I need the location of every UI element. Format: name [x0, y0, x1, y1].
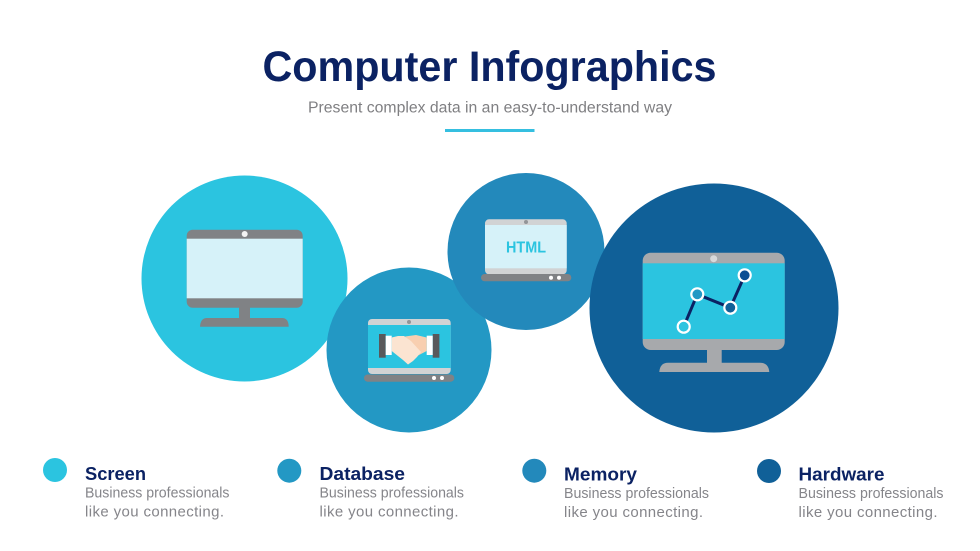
legend: memory: Business professionals: [564, 485, 709, 502]
legend: memory: like you connecting.: [564, 504, 703, 521]
subtitle: Present complex data in an easy-to-understand way: [308, 100, 672, 116]
legend: screen: [43, 458, 230, 520]
legend: hardware: like you connecting.: [798, 504, 938, 521]
panel: database circle: [326, 268, 492, 432]
icon: laptop with HTML: [481, 219, 571, 281]
legend: screen: Screen: [85, 463, 146, 484]
legend: database: [277, 459, 464, 520]
icon: laptop with handshake: [364, 319, 454, 382]
panel: screen circle: [142, 176, 348, 382]
legend: hardware: Business professionals: [798, 485, 944, 502]
legend: hardware: Hardware: [798, 463, 884, 484]
line chart: [678, 269, 751, 333]
legend: screen: like you connecting.: [85, 504, 224, 520]
icon: laptop with HTML: HTML: [506, 240, 546, 256]
panel: hardware circle: [590, 184, 838, 432]
legend: database: Database: [320, 463, 405, 484]
accent rule: [445, 129, 534, 132]
legend: database: like you connecting.: [320, 504, 458, 520]
legend: memory: [522, 459, 709, 521]
title: Computer Infographics: [262, 43, 716, 91]
panel: memory circle: [448, 173, 604, 330]
legend: hardware: [757, 459, 944, 521]
icon: monitor with line chart: [643, 253, 785, 372]
icon: handshake: [379, 334, 439, 364]
icon: desktop monitor: [187, 230, 303, 327]
legend: database: Business professionals: [320, 484, 464, 502]
legend: screen: Business professionals: [85, 484, 230, 502]
legend: memory: Memory: [564, 463, 638, 484]
